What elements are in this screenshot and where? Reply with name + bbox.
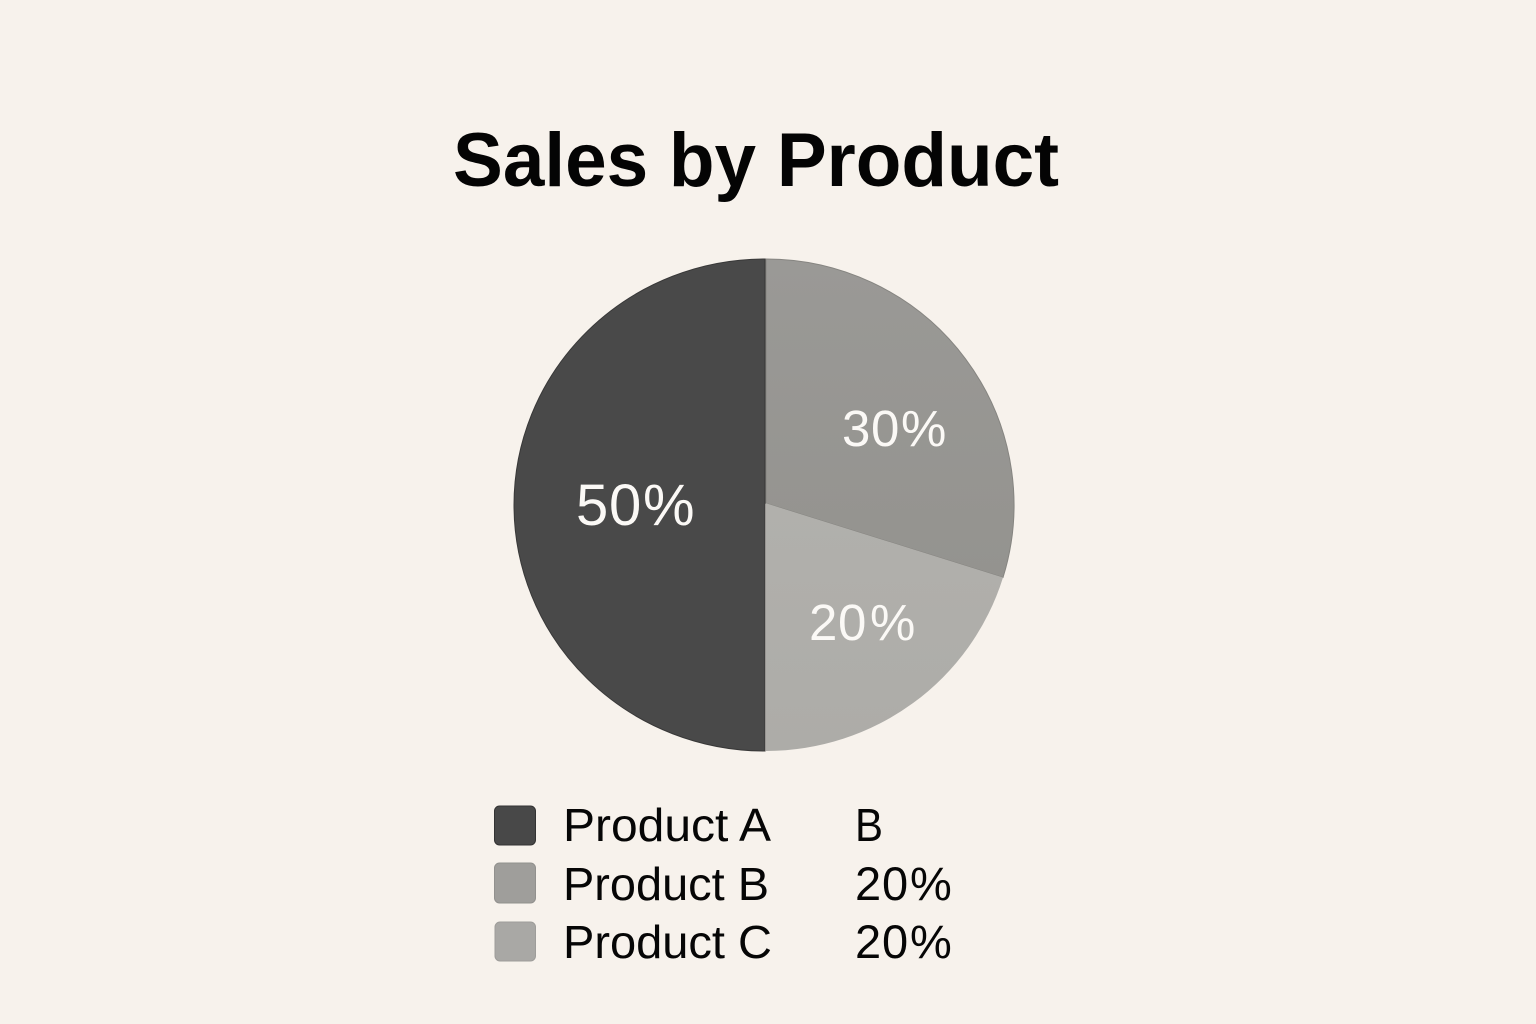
swatch: Product C <box>495 922 536 961</box>
legend label: Product C: Product C <box>563 916 772 968</box>
label: 20%: 20% <box>809 594 915 651</box>
pie chart <box>514 259 1014 751</box>
legend value: 20%: 20% <box>855 857 952 910</box>
legend label: Product A: Product A <box>563 799 771 851</box>
label: 30%: 30% <box>842 400 946 457</box>
legend value: B: B <box>855 799 883 851</box>
label: 50%: 50% <box>576 473 695 538</box>
swatch: Product B <box>494 863 536 903</box>
title: Sales by Product <box>453 118 1059 203</box>
slice: Product A 50% <box>514 259 765 751</box>
legend value: 20%: 20% <box>855 915 952 968</box>
slice: Product C 20% <box>766 503 1003 751</box>
legend <box>494 799 952 968</box>
slice: Product B 30% <box>766 259 1014 578</box>
legend label: Product B: Product B <box>563 858 769 910</box>
swatch: Product A <box>494 806 536 845</box>
